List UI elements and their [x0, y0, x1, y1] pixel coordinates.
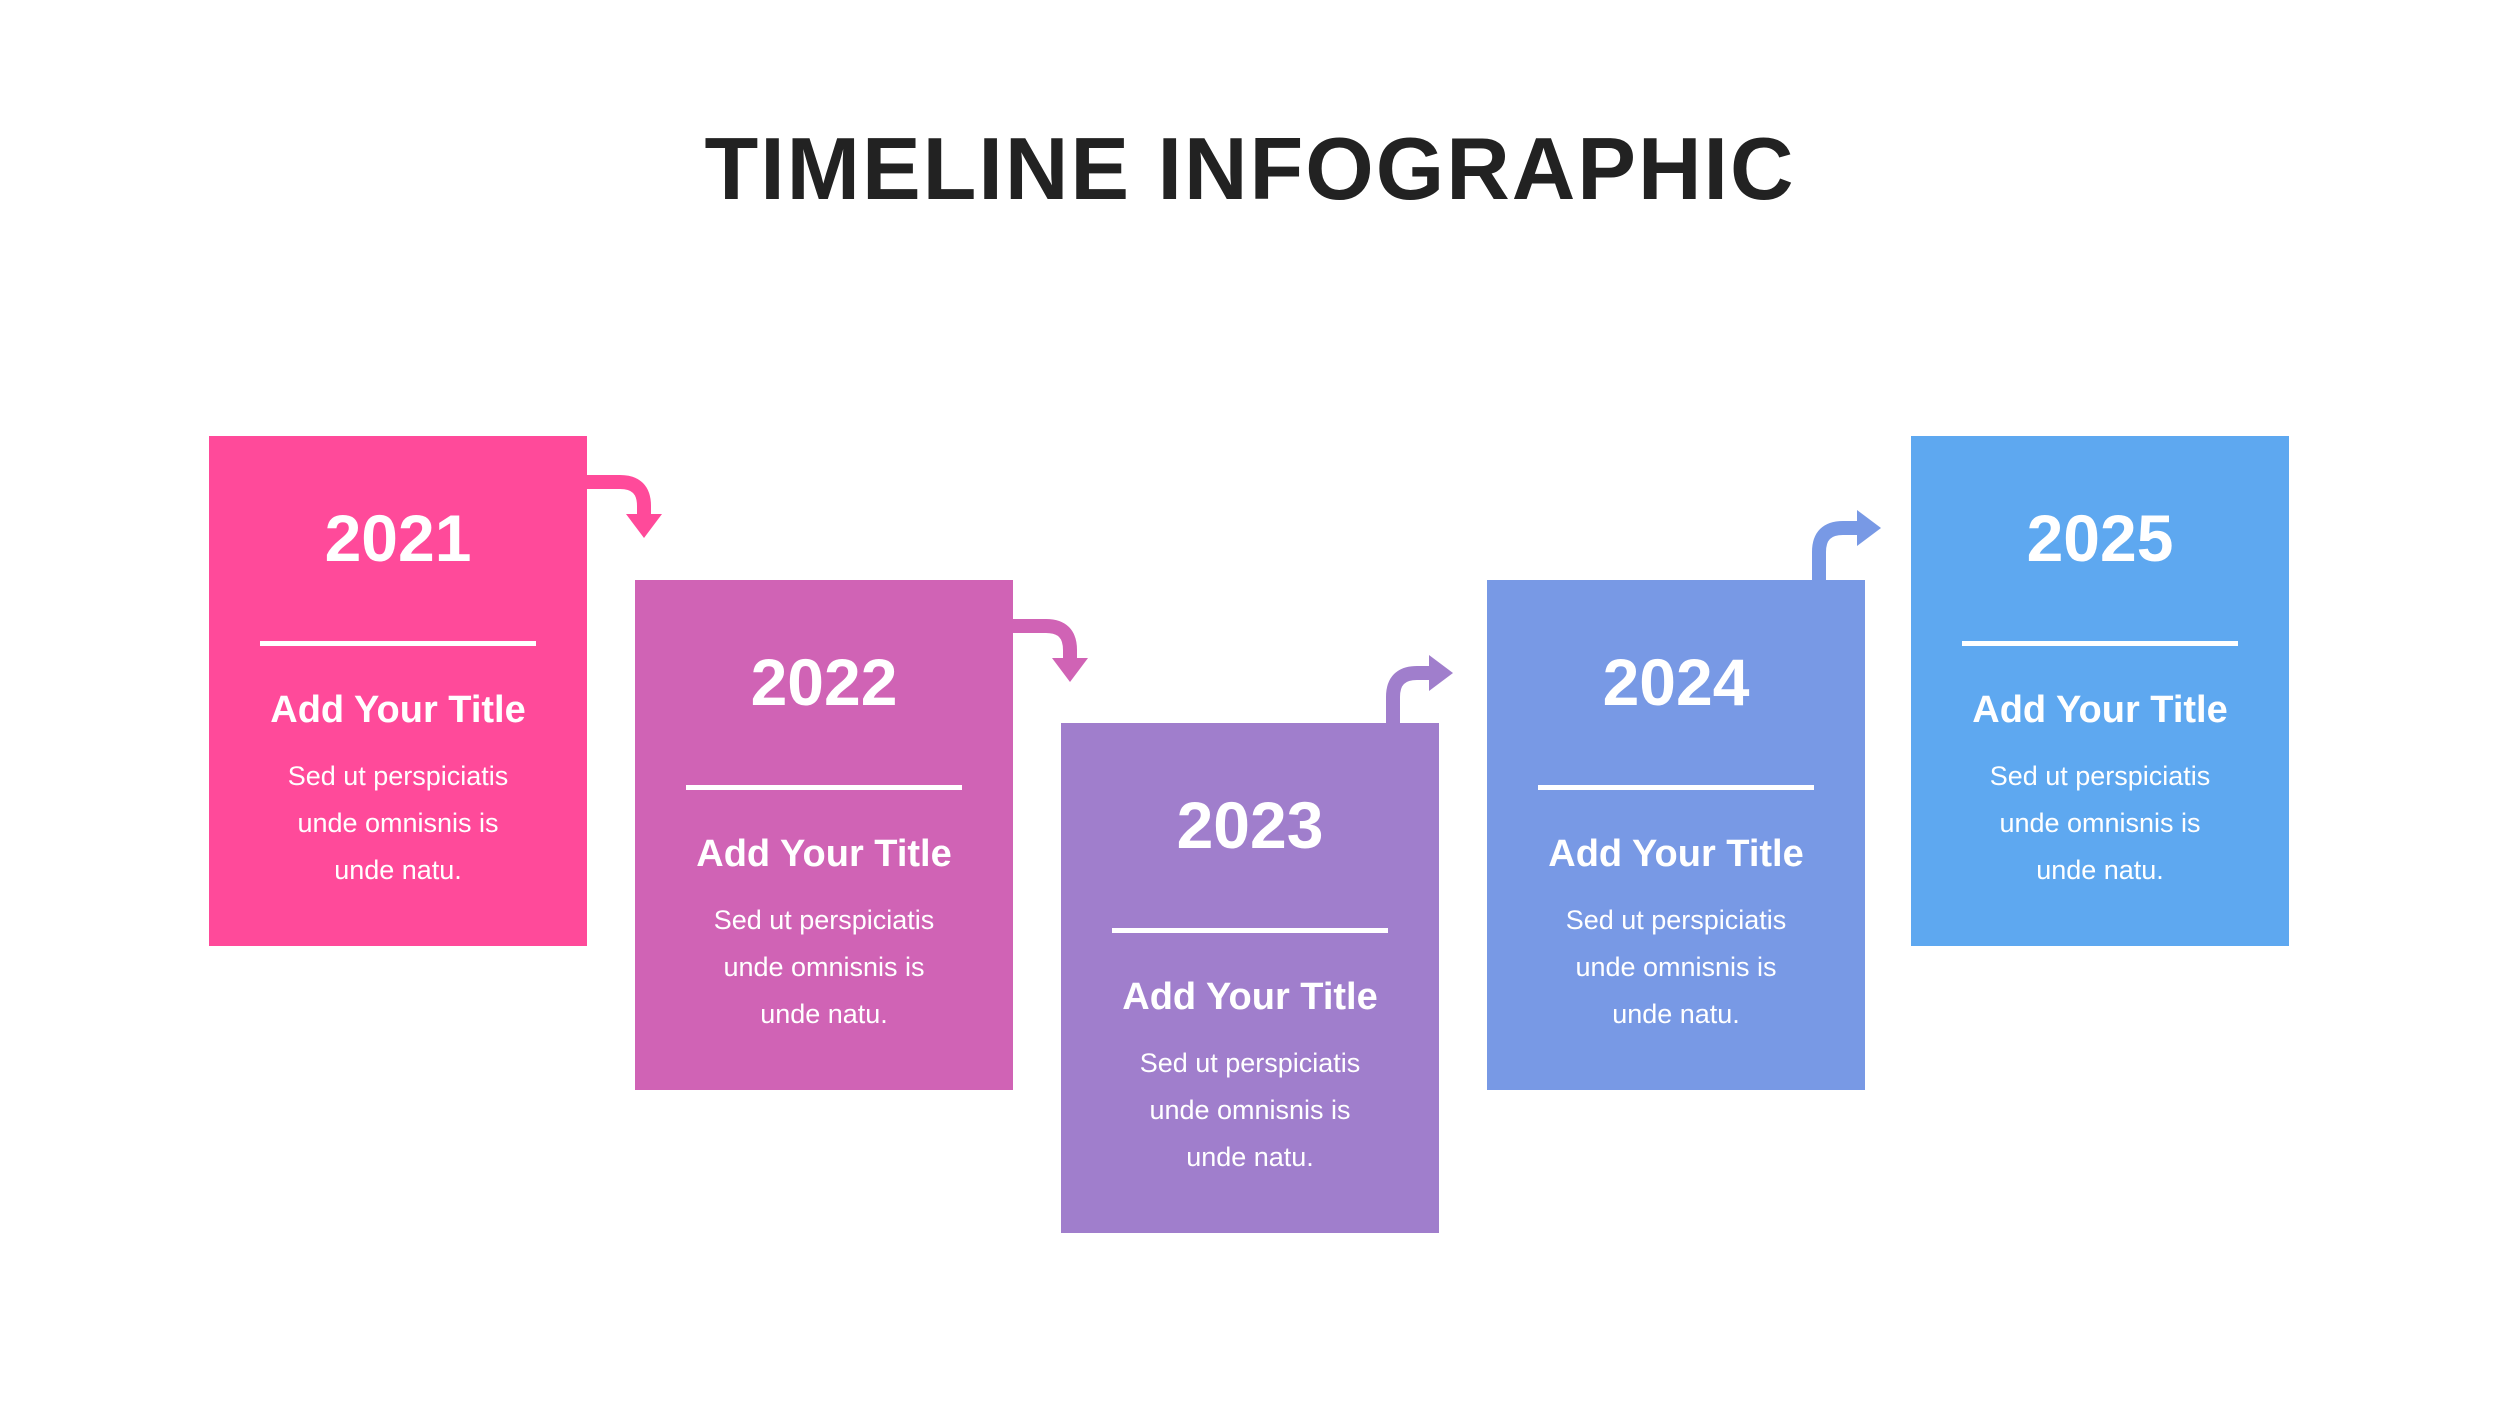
- body 2024: unde omnisnis is: [1575, 952, 1777, 982]
- body 2022: unde natu.: [760, 999, 888, 1029]
- body 2025: [1990, 761, 2210, 885]
- card: 2021: [209, 436, 587, 946]
- title: TIMELINE INFOGRAPHIC: [704, 119, 1796, 218]
- card: 2025: [1911, 436, 2289, 946]
- body 2023: unde omnisnis is: [1149, 1095, 1351, 1125]
- body 2021: [288, 761, 508, 885]
- body 2025: Sed ut perspiciatis: [1990, 761, 2210, 791]
- body 2023: [1140, 1048, 1360, 1172]
- card title 2023: Add Your Title: [1122, 976, 1378, 1018]
- body 2024: Sed ut perspiciatis: [1566, 905, 1786, 935]
- body 2024: [1566, 905, 1786, 1029]
- year 2024: 2024: [1603, 645, 1749, 719]
- card title 2024: Add Your Title: [1548, 833, 1804, 875]
- body 2022: unde omnisnis is: [723, 952, 925, 982]
- arrow 3: [1393, 655, 1453, 723]
- body 2024: unde natu.: [1612, 999, 1740, 1029]
- card title 2021: Add Your Title: [270, 689, 526, 731]
- card: 2023: [1061, 723, 1439, 1233]
- year 2023: 2023: [1177, 788, 1323, 862]
- body 2023: unde natu.: [1186, 1142, 1314, 1172]
- body 2023: Sed ut perspiciatis: [1140, 1048, 1360, 1078]
- body 2021: unde natu.: [334, 855, 462, 885]
- body 2022: [714, 905, 934, 1029]
- body 2021: unde omnisnis is: [297, 808, 499, 838]
- arrow 1: [587, 482, 662, 538]
- body 2022: Sed ut perspiciatis: [714, 905, 934, 935]
- card: 2024: [1487, 580, 1865, 1090]
- arrow 4: [1819, 510, 1881, 580]
- year 2021: 2021: [325, 501, 471, 575]
- year 2022: 2022: [751, 645, 897, 719]
- card title 2022: Add Your Title: [696, 833, 952, 875]
- body 2025: unde natu.: [2036, 855, 2164, 885]
- card title 2025: Add Your Title: [1972, 689, 2228, 731]
- arrow 2: [1013, 626, 1088, 682]
- body 2021: Sed ut perspiciatis: [288, 761, 508, 791]
- body 2025: unde omnisnis is: [1999, 808, 2201, 838]
- card: 2022: [635, 580, 1013, 1090]
- year 2025: 2025: [2027, 501, 2173, 575]
